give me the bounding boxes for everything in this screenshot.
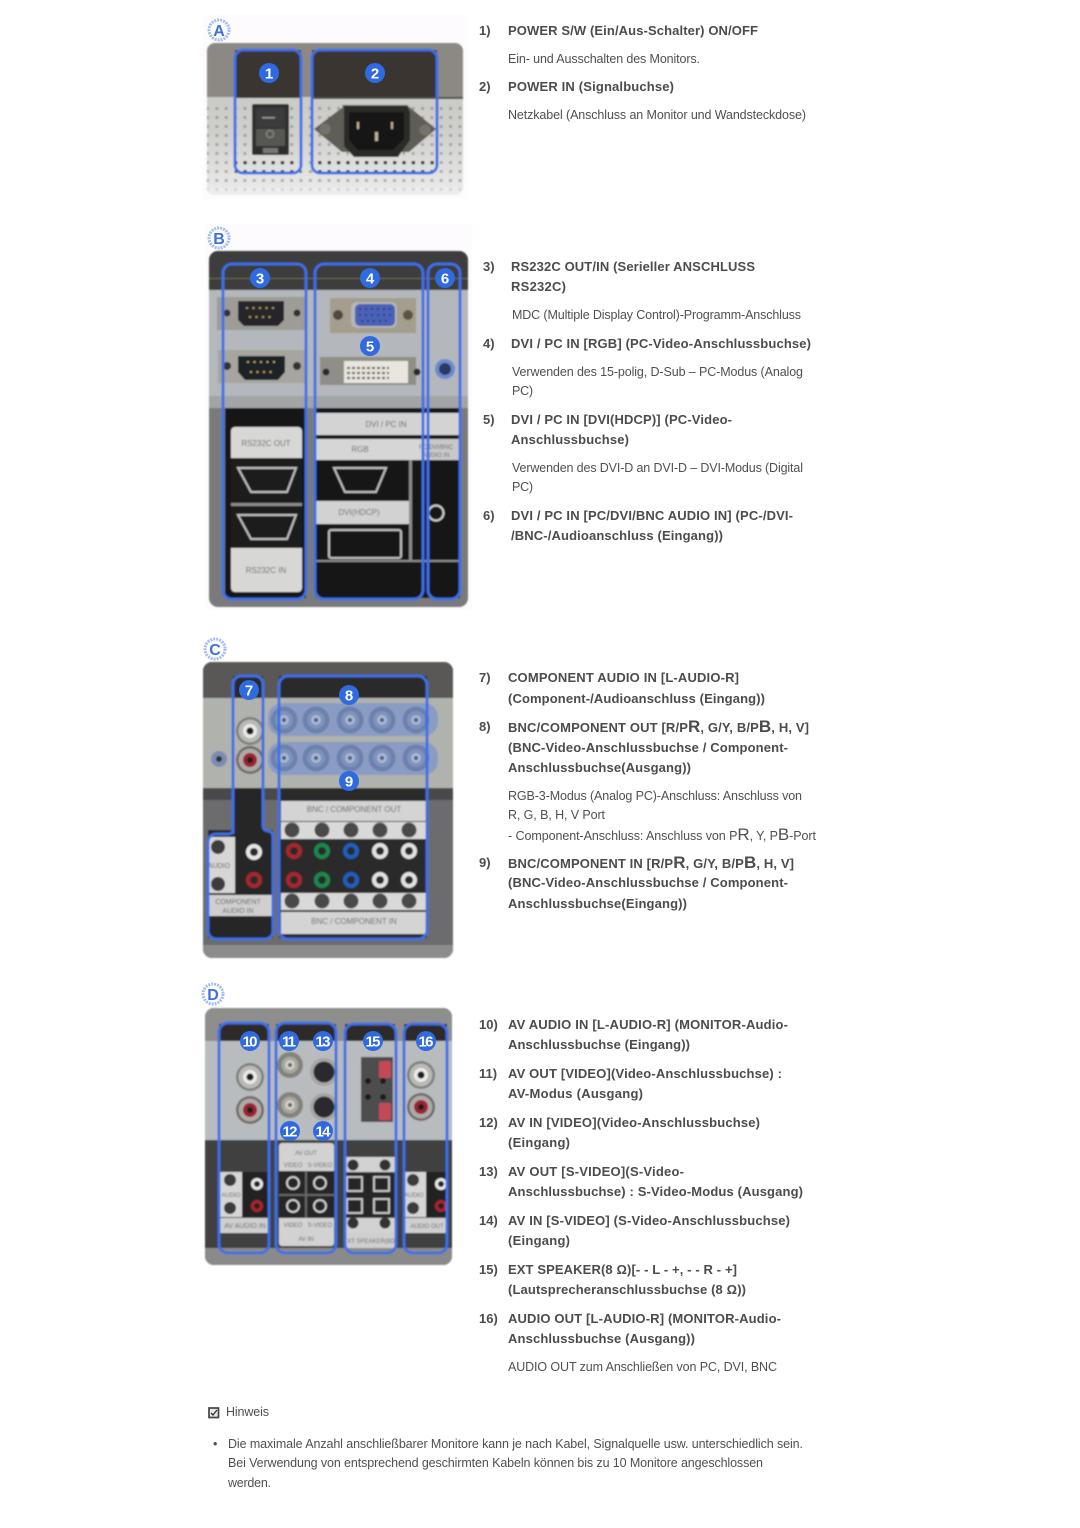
item 2: Netzkabel (Anschluss an Monitor und Wandsteckdose) [508,108,806,122]
text: items 10 to 16 [479,1017,803,1374]
item 1 [479,23,758,66]
item 14 [479,1213,790,1248]
badge 14 [313,1121,333,1141]
connector: RS232C out [217,297,307,330]
component audio labels: COMPONENT [215,899,261,906]
item 12 [479,1115,760,1150]
item 2 [479,79,806,122]
frame 3 [223,264,306,599]
item 11 [479,1066,782,1101]
connector: audio jack [435,359,455,379]
component audio labels: AUDIO [208,863,231,870]
badge 5: 5 [366,338,374,356]
badge 8: 8 [345,688,353,704]
badge B [209,228,229,248]
AV in and out labels [279,1143,334,1246]
audio out labels: AUDIO OUT [410,1224,444,1230]
item 8: Anschlussbuchse(Ausgang)) [508,760,691,775]
item 2: 2) [479,79,491,94]
badge 6: 6 [441,270,449,288]
frame 16 [404,1024,447,1253]
connector: DVI [320,357,420,385]
item 8: BNC/COMPONENT OUT [R/PR, G/Y, B/PB, H, V] [508,717,809,736]
BNC component out labels: BNC / COMPONENT OUT [307,805,401,814]
item 4: 4) [483,336,495,351]
item 4: DVI / PC IN [RGB] (PC-Video-Anschlussbuchse) [511,336,811,351]
note body: • [213,1437,217,1451]
item 5: 5) [483,412,495,427]
badge 6 [435,268,455,288]
BNC component in labels [281,893,426,934]
colored sockets in row [288,874,415,886]
DVI and RGB label panel: DVI / PC IN [365,420,407,429]
badge 11: 11 [282,1034,296,1050]
badge 12: 12 [282,1124,298,1140]
item 6: DVI / PC IN [PC/DVI/BNC AUDIO IN] (PC-/DVI- [511,508,793,523]
item 9: 9) [479,855,491,870]
frame 2 [312,50,437,173]
connector: VGA [330,298,416,333]
external speaker labels [343,1157,397,1248]
DVI and RGB label panel: PC/DVI/BNC [419,445,454,451]
connectors: BNC rows [270,706,430,772]
badge 9 [339,771,359,791]
item 3: 3) [483,259,495,274]
item 3 [483,259,801,322]
AV in and out labels: S-VIDEO [308,1163,333,1169]
item 10: 10) [479,1017,498,1032]
note body: Die maximale Anzahl anschließbarer Monitore kann je nach Kabel, Signalquelle usw. unterschiedlich sein. [228,1437,803,1451]
item 15: (Lautsprecheranschlussbuchse (8 Ω)) [508,1282,746,1297]
component audio labels [208,837,272,916]
connectors: video BNC and S-video [277,1052,338,1121]
item 8: (BNC-Video-Anschlussbuchse / Component- [508,740,788,755]
item 13 [479,1164,803,1199]
item 16: AUDIO OUT zum Anschließen von PC, DVI, BNC [508,1360,777,1374]
item 9: BNC/COMPONENT IN [R/PR, G/Y, B/PB, H, V] [508,853,794,872]
badge C: C [209,642,221,659]
item 12: (Eingang) [508,1135,570,1150]
AV audio in labels: AV AUDIO IN [224,1223,266,1230]
item 15: EXT SPEAKER(8 Ω)[- - L - +, - - R - +] [508,1262,737,1277]
RS232C label panel: RS232C OUT [241,439,291,448]
badge 7: 7 [245,682,253,700]
item 16: Anschlussbuchse (Ausgang)) [508,1331,695,1346]
item 10: AV AUDIO IN [L-AUDIO-R] (MONITOR-Audio- [508,1017,788,1032]
item 9: Anschlussbuchse(Eingang)) [508,896,687,911]
frame 15 [345,1024,396,1253]
item 9: (BNC-Video-Anschlussbuchse / Component- [508,875,788,890]
AV in and out labels: AV OUT [295,1151,317,1157]
panel A: power connectors photo [203,15,468,199]
badge 4: 4 [366,270,375,288]
item 14: 14) [479,1213,498,1228]
item 5: PC) [512,480,533,494]
text: items 3 to 6 [483,259,811,543]
badge D: D [207,987,219,1004]
AV in and out labels: AV IN [298,1237,314,1243]
item 1: 1) [479,23,491,38]
item 5: DVI / PC IN [DVI(HDCP)] (PC-Video- [511,412,732,427]
item 2: POWER IN (Signalbuchse) [508,79,674,94]
badge 1: 1 [265,66,273,82]
item 10 [479,1017,788,1052]
item 15: 15) [479,1262,498,1277]
icon: note checkbox [209,1408,218,1418]
connector: speaker terminals [361,1057,393,1122]
AV audio in labels: AUDIO [221,1193,241,1199]
connector: RS232C in [218,350,306,383]
DVI and RGB label panel: AUDIO IN [423,453,449,459]
frame 8 and 9 [279,676,427,939]
badge 16 [416,1031,436,1051]
item 5 [483,412,803,494]
badge 14: 14 [316,1124,331,1140]
badge 3 [250,268,270,288]
item 7: (Component-/Audioanschluss (Eingang)) [508,691,765,706]
text: items 7 to 9 [479,670,817,911]
badge D [203,984,223,1004]
icon: power socket [314,105,436,157]
DVI and RGB label panel: RGB [351,445,369,454]
badge 1 [259,63,279,83]
colored sockets out row [288,845,415,857]
panel B: serial and PC connectors photo [205,224,472,610]
badge 15 [363,1031,383,1051]
frame 10 [219,1023,269,1253]
badge 11 [279,1031,299,1051]
item 12: AV IN [VIDEO](Video-Anschlussbuchse) [508,1115,760,1130]
audio out labels: AUDIO [404,1193,424,1199]
item 8 [479,717,817,844]
item 15 [479,1262,746,1297]
note body: Bei Verwendung von entsprechend geschirmten Kabeln können bis zu 10 Monitore angeschlossen [228,1456,763,1470]
badge 5 [360,336,380,356]
badge 13: 13 [316,1034,330,1050]
item 7: 7) [479,670,491,685]
item 6 [483,508,793,543]
AV audio in labels [220,1172,269,1233]
item 4 [483,336,811,398]
badge 13 [313,1031,333,1051]
external speaker labels: EXT SPEAKER(8Ω) [343,1239,397,1245]
item 8: RGB-3-Modus (Analog PC)-Anschluss: Anschluss von [508,789,802,803]
note heading: Hinweis [226,1405,269,1419]
component audio labels: AUDIO IN [222,908,254,915]
item 8: R, G, B, H, V Port [508,808,606,822]
badge 2: 2 [371,66,379,82]
icon: power switch [252,104,289,155]
frame 7 [208,676,273,939]
item 14: AV IN [S-VIDEO] (S-Video-Anschlussbuchse) [508,1213,790,1228]
item 16 [479,1311,781,1374]
badge B: B [213,231,225,248]
item 3: RS232C) [511,279,566,294]
frame 11 to 14 [276,1023,336,1253]
note body [213,1437,803,1490]
item 16: 16) [479,1311,498,1326]
badge 9: 9 [345,774,353,790]
text: items 1 and 2 [479,23,806,122]
item 13: Anschlussbuchse) : S-Video-Modus (Ausgang) [508,1184,803,1199]
badge 4 [360,268,380,288]
item 12: 12) [479,1115,498,1130]
AV in and out labels: VIDEO [284,1223,303,1229]
badge 10 [240,1031,260,1051]
item 5: Verwenden des DVI-D an DVI-D – DVI-Modus (Digital [512,461,803,475]
item 3: RS232C OUT/IN (Serieller ANSCHLUSS [511,259,755,274]
connectors: audio out [407,1061,435,1121]
item 8: 8) [479,719,491,734]
connectors: audio RCA pair [211,717,264,774]
item 7 [479,670,765,706]
AV in and out labels: S-VIDEO [308,1223,333,1229]
badge 10: 10 [242,1034,258,1050]
badge 2 [365,63,385,83]
note body: werden. [227,1476,271,1490]
item 9 [479,853,794,911]
badge 16: 16 [418,1034,434,1050]
panel D: AV connectors photo [203,984,452,1265]
item 11: AV OUT [VIDEO](Video-Anschlussbuchse) : [508,1066,782,1081]
item 6: /BNC-/Audioanschluss (Eingang)) [511,528,723,543]
connectors: AV audio in [236,1063,264,1124]
badge A: A [213,23,225,40]
item 13: 13) [479,1164,498,1179]
RS232C label panel [231,427,302,592]
item 7: COMPONENT AUDIO IN [L-AUDIO-R] [508,670,739,685]
frame 1 [235,50,301,173]
item 6: 6) [483,508,495,523]
item 8: - Component-Anschluss: Anschluss von PR, Y, PB-Port [508,825,817,844]
badge A [209,20,229,40]
item 11: 11) [479,1066,497,1081]
panel C: component connectors photo [203,639,453,958]
frame 4 and 5 [315,264,423,599]
item 5: Anschlussbuchse) [511,432,629,447]
item 11: AV-Modus (Ausgang) [508,1086,643,1101]
item 4: PC) [512,384,533,398]
badge 8 [339,685,359,705]
badge 3: 3 [256,270,264,288]
item 13: AV OUT [S-VIDEO](S-Video- [508,1164,684,1179]
item 10: Anschlussbuchse (Eingang)) [508,1037,690,1052]
note: Hinweis [209,1405,803,1490]
RS232C label panel: RS232C IN [246,566,286,575]
BNC component out labels [281,801,426,839]
badge 7 [239,680,259,700]
item 4: Verwenden des 15-polig, D-Sub – PC-Modus (Analog [512,365,803,379]
frame 6 [428,264,460,599]
BNC component in labels: BNC / COMPONENT IN [311,917,397,926]
item 16: AUDIO OUT [L-AUDIO-R] (MONITOR-Audio- [508,1311,781,1326]
badge C [205,639,225,659]
item 1: Ein- und Ausschalten des Monitors. [508,52,700,66]
DVI and RGB label panel: DVI(HDCP) [338,508,380,517]
item 1: POWER S/W (Ein/Aus-Schalter) ON/OFF [508,23,758,38]
item 3: MDC (Multiple Display Control)-Programm-Anschluss [512,308,801,322]
DVI and RGB label panel [316,413,460,562]
badge 12 [280,1121,300,1141]
audio out labels [404,1172,446,1233]
badge 15: 15 [366,1034,380,1050]
item 14: (Eingang) [508,1233,570,1248]
AV in and out labels: VIDEO [284,1163,303,1169]
